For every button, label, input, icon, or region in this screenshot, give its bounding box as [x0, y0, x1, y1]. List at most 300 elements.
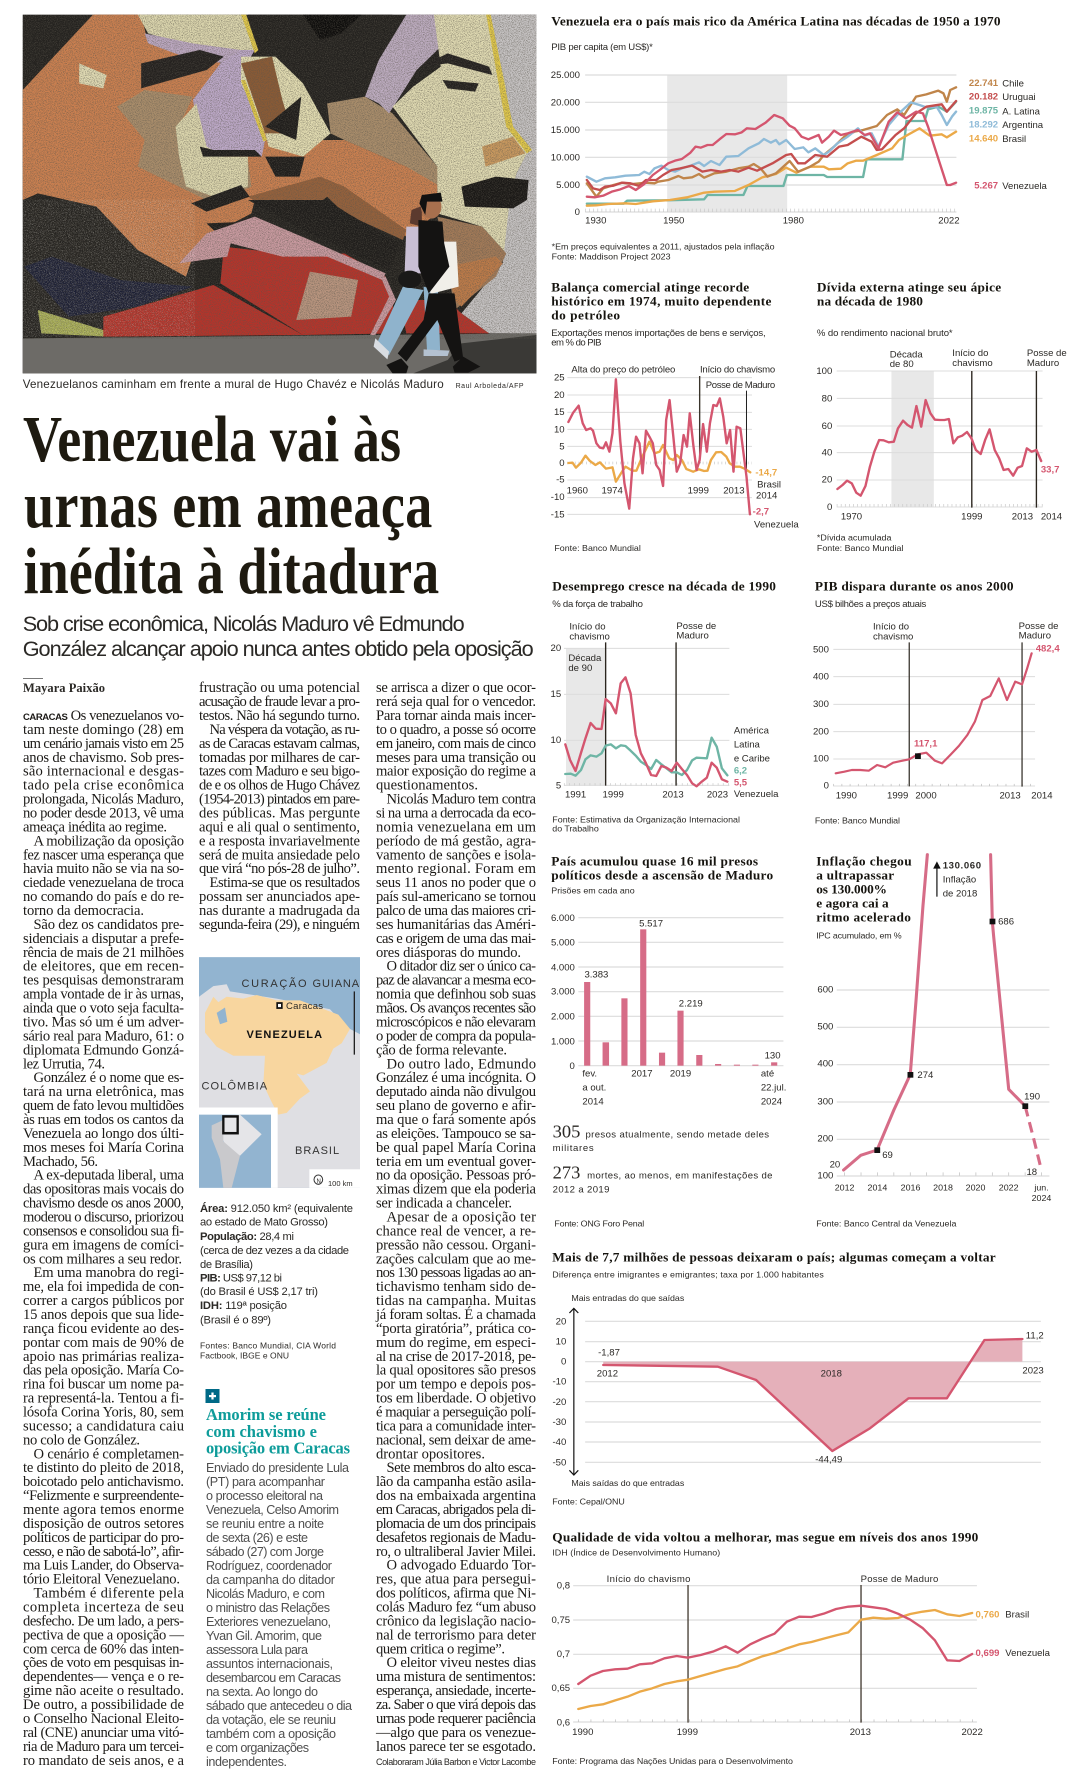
data labels: 18: [1026, 1167, 1037, 1178]
article text column 1: González é o nome que es-: [34, 1070, 184, 1086]
y axis labels: 200: [817, 1134, 833, 1145]
chart title: [551, 853, 774, 882]
value labels: 482,4: [1036, 643, 1060, 654]
legend: 19.875: [969, 105, 998, 116]
chart: PIB: [813, 578, 1060, 826]
source: Fonte: Banco Mundial: [817, 543, 903, 553]
article text column 3: ses humanitárias das Améri-: [376, 917, 536, 933]
line: Argentina: [587, 102, 956, 182]
y axis labels: 200: [813, 726, 829, 737]
article text column 1: A mobilização da oposição: [34, 833, 184, 849]
map: Venezuela: VENEZUELA: [246, 1029, 324, 1041]
annotations: [568, 621, 716, 674]
chart title: Qualidade de vida voltou a melhorar, mas segue em níveis dos anos 1990: [552, 1530, 979, 1545]
event markers: [698, 376, 702, 463]
article text column 3: Colaboraram Júlia Barbon e Victor Lacombe: [376, 1757, 536, 1767]
article text column 3: O advogado Eduardo Tor-: [386, 1558, 536, 1574]
country facts: Área: 912.050 km² (equivalente: [200, 1202, 353, 1215]
article text column 3: nos 130 pessoas ligadas ao an-: [376, 1265, 536, 1281]
y axis labels: -20: [553, 1397, 566, 1408]
annotations: Início do: [952, 348, 988, 359]
series labels: América: [734, 726, 770, 737]
chart subtitle: % da força de trabalho: [552, 599, 643, 610]
y axis labels: 6.000: [551, 913, 575, 924]
article text column 3: tica para a comunidade inter-: [376, 1418, 536, 1434]
article text column 3: dos políticos, afirma que Ni-: [376, 1586, 536, 1602]
article text column 1: ria de Maduro para um tercei-: [23, 1739, 184, 1755]
chart title: Mais de 7,7 milhões de pessoas deixaram o país; algumas começam a voltar: [552, 1250, 996, 1265]
article text column 1: consensos e consolidou sua fi-: [23, 1223, 184, 1239]
article text column 3: ores diásporas do mundo.: [376, 945, 521, 961]
country facts: Factbook, IBGE e ONU: [200, 1350, 289, 1360]
article text column 3: esperança, ansiedade, incerte-: [376, 1683, 536, 1699]
article text column 2: tazes com Maduro e seu bigo-: [199, 764, 360, 780]
chart: dívida externa: [816, 280, 1067, 553]
article text column 3: no da oposição. Pessoas pró-: [376, 1168, 536, 1184]
article text column 1: quem de fato levou multidões: [23, 1098, 184, 1114]
x axis labels: 1980: [783, 215, 804, 226]
sidebar text: independentes.: [206, 1755, 287, 1769]
y axis labels: -10: [551, 492, 565, 503]
article text column 3: seu plano de governo e afir-: [376, 1098, 536, 1114]
x axis labels: 1991: [565, 789, 586, 800]
annotations: chavismo: [952, 358, 993, 369]
article text column 1: mos meses foi María Corina: [23, 1140, 185, 1156]
y axis labels: 15.000: [551, 125, 580, 136]
chart: desemprego: [551, 578, 1060, 834]
article text column 3: Apesar de a oposição ter: [386, 1210, 536, 1226]
article text column 1: tado pela crise econômica: [23, 778, 185, 794]
article text column 2: aqui e ali qual o sentimento,: [199, 819, 360, 835]
x axis labels: 1999: [961, 511, 982, 522]
article text column 1: das pela oposição. María Co-: [23, 1363, 184, 1379]
y axis labels: -5: [556, 475, 565, 486]
stat: 273 mortes: [553, 1163, 772, 1195]
end labels: Brasil: [757, 479, 781, 490]
series labels: Venezuela: [734, 789, 779, 800]
article text column 3: desafetos regionais de Madu-: [376, 1530, 536, 1546]
labels: 2018: [821, 1369, 842, 1380]
x axis labels: 1999: [603, 789, 624, 800]
line: inflação: [844, 855, 927, 1170]
line: PIB Venezuela: [836, 653, 1032, 773]
article text column 3: colás Maduro fez “um abuso: [376, 1600, 536, 1616]
source: [552, 814, 740, 834]
icon: plus: [206, 1389, 220, 1403]
labels: 2023: [1022, 1365, 1044, 1376]
article text column 1: me, ela foi impedida de con-: [23, 1279, 184, 1295]
x axis labels: 2019: [670, 1069, 691, 1080]
article text column 3: uma mistura de sentimentos:: [376, 1669, 536, 1685]
sidebar text: o processo eleitoral na: [206, 1489, 323, 1503]
x axis labels: 2013: [1012, 511, 1033, 522]
stat: 305 presos: 305: [553, 1122, 580, 1141]
article text column 1: ma Luis Lander, do Observa-: [23, 1558, 184, 1574]
sidebar text: (PT) para acompanhar: [206, 1475, 325, 1489]
x axis labels: [585, 215, 960, 226]
x axis labels: 2000: [915, 790, 937, 801]
event markers: [606, 642, 676, 786]
y axis labels: -15: [551, 509, 565, 520]
country facts: [200, 1202, 353, 1360]
source: Fonte: ONG Foro Penal: [554, 1219, 644, 1229]
sidebar text: sábado que antecedeu o dia: [206, 1699, 352, 1713]
labels: 11,2: [1026, 1330, 1044, 1341]
article text column 3: microscópicos e não elevaram: [376, 1014, 537, 1030]
country facts: Fontes: Banco Mundial, CIA World: [200, 1341, 336, 1351]
article text column 1: O cenário é completamen-: [34, 1446, 184, 1462]
value labels: 117,1: [914, 739, 937, 750]
annotations: Início do chavismo: [700, 365, 775, 376]
article text column 3: Do outro lado, Edmundo: [386, 1056, 536, 1072]
article text column 3: drontar opositores.: [376, 1446, 485, 1462]
article text column 1: ciedade venezuelana de troca: [23, 875, 185, 891]
annotations: Início do: [569, 622, 606, 633]
chart title: [551, 280, 772, 323]
y axis labels: 20.000: [551, 97, 580, 108]
y axis labels: 10: [554, 425, 565, 436]
chart title: políticos desde a ascensão de Maduro: [551, 867, 774, 882]
data labels: 274: [917, 1070, 933, 1081]
article text column 3: maior exposição do regime a: [376, 764, 537, 780]
chart subtitle: PIB per capita (em US$)*: [551, 42, 653, 53]
annotations: chavismo: [569, 631, 610, 642]
photo caption: Venezuelanos caminham em frente a mural de Hugo Chavéz e Nicolás Maduro: [23, 378, 444, 391]
stat: 273 mortes: 273: [553, 1163, 580, 1183]
sidebar text: se reuniu entre a noite: [206, 1517, 324, 1531]
article text column 3: questionamentos.: [376, 778, 478, 794]
stat: 305 presos: presos atualmente, sendo metade deles: [585, 1129, 769, 1140]
article text column 1: moderou o discurso, priorizou: [23, 1210, 185, 1226]
y axis labels: 0,75: [551, 1615, 570, 1626]
y axis labels: 0,6: [557, 1717, 570, 1728]
x axis labels: [841, 511, 1062, 522]
article text column 1: ral (CNE) anunciar uma vitó-: [23, 1725, 184, 1741]
chart: migração: [552, 1250, 1044, 1506]
photo: mural of Chávez and Maduro with pedestrians: [23, 15, 536, 373]
sidebar text: também com a oposição: [206, 1727, 336, 1741]
article text column 2: des públicas. Mas pergunte: [199, 806, 360, 822]
y axis labels: [813, 644, 829, 792]
article text column 1: no colo de González.: [23, 1432, 140, 1448]
chart title: e agora cai a: [816, 895, 889, 910]
y axis labels: [816, 366, 832, 513]
y axis labels: 100: [813, 754, 829, 765]
subheadline: González alcançar apoio nunca antes obtido pela oposição: [23, 636, 534, 661]
y axis labels: 10: [556, 1337, 566, 1348]
event markers: [688, 1585, 861, 1723]
article text column 3: nal de terrorismo para deter: [376, 1627, 536, 1643]
article text column 1: um cenário jamais visto em 25: [23, 736, 184, 752]
y axis labels: 0: [575, 207, 580, 218]
article text column 3: la qual opositores são presos: [376, 1363, 536, 1379]
article text column 1: sidenciais a disputar a prefe-: [23, 931, 184, 947]
article text column 3: ma que o fará somente após: [376, 1112, 536, 1128]
y axis labels: 80: [822, 393, 832, 404]
article text column 1: o Conselho Nacional Eleito-: [23, 1711, 184, 1727]
x axis labels: 22.jul.: [761, 1083, 786, 1094]
series labels: 0,699: [976, 1648, 999, 1659]
y axis labels: 5: [559, 441, 565, 452]
article text column 2: as de Caracas estavam calmas,: [199, 736, 360, 752]
article text column 3: dos na embaixada argentina: [376, 1488, 537, 1504]
y axis labels: 0,8: [557, 1581, 570, 1592]
article text column 3: Nicolás Maduro tem contra: [386, 792, 537, 808]
event markers: [909, 642, 1022, 787]
article text column 3: as eleições. Tampouco se sa-: [376, 1126, 536, 1142]
article text column 2: tomadas por milhares de car-: [199, 750, 360, 766]
article text column 3: nomia venezuelana em um: [376, 819, 537, 835]
article text column 1: tam neste domingo (28) em: [23, 722, 185, 738]
annotations: [873, 621, 1058, 642]
sidebar heading: [206, 1405, 351, 1458]
sidebar text: sábado (27) com Jorge: [206, 1545, 324, 1559]
y axis labels: -10: [553, 1377, 566, 1388]
y axis labels: 100: [817, 1171, 833, 1182]
article text column 2: frustração ou uma potencial: [199, 680, 360, 696]
article text column 3: be qual papel María Corina: [376, 1140, 537, 1156]
map: Venezuela: BRASIL: [295, 1145, 340, 1157]
article text column 1: havia muito não se via na so-: [23, 861, 184, 877]
chart title: [816, 853, 912, 924]
sidebar text: [206, 1461, 352, 1769]
y axis labels: 300: [813, 699, 829, 710]
sidebar text: e com organizações: [206, 1741, 309, 1755]
chart title: PIB dispara durante os anos 2000: [815, 578, 1014, 593]
article text column 1: rina foi buscar um nome pa-: [23, 1377, 184, 1393]
y axis labels: 10: [551, 735, 561, 746]
article text column 3: O eleitor viveu nestes dias: [386, 1655, 536, 1671]
line: inflação descending: [991, 855, 1025, 1106]
y axis labels: 1.000: [551, 1036, 575, 1047]
sidebar heading: oposição em Caracas: [206, 1438, 351, 1458]
article text column 1: ro mandato de seis anos, e a: [23, 1753, 185, 1769]
legend: 5.267: [974, 180, 998, 191]
source: Fonte: Banco Mundial: [815, 816, 900, 826]
line: dívida: [837, 400, 1041, 496]
article text column 1: fez nascer uma esperança que: [23, 847, 184, 863]
country facts: de Brasília): [200, 1259, 253, 1271]
annotations: Alta do preço do petróleo: [571, 365, 675, 376]
article text column 1: completa incerteza de seu: [23, 1600, 185, 1616]
annotations: Posse de: [1027, 348, 1067, 359]
line: inflação projected: [1025, 1106, 1042, 1171]
source: Fonte: Banco Mundial: [554, 543, 641, 553]
line: A. Latina: [587, 102, 956, 204]
article text column 1: Machado, 56.: [23, 1154, 98, 1170]
sidebar text: Venezuela, Celso Amorim: [206, 1503, 339, 1517]
y axis labels: [817, 984, 833, 1182]
x axis labels: 2018: [933, 1183, 953, 1193]
map: Venezuela: Caracas: [286, 1001, 323, 1012]
sidebar text: Rodríguez, coordenador: [206, 1559, 332, 1573]
x axis labels: 1999: [688, 486, 709, 497]
country facts: (do Brasil é US$ 2,17 tri): [200, 1286, 318, 1298]
article text column 3: —algo que para os venezue-: [375, 1725, 536, 1741]
labels: -44,49: [815, 1454, 842, 1465]
x axis labels: [572, 1727, 983, 1738]
article text column 2: testos. Não há segundo turno.: [199, 708, 360, 724]
article text column 2: nas durante a madrugada da: [199, 903, 361, 919]
bar labels: 130: [765, 1050, 781, 1061]
bar labels: 3.383: [584, 970, 608, 981]
y axis labels: 20: [551, 643, 561, 654]
article text column 3: Para tornar ainda mais incer-: [376, 708, 536, 724]
chart: balança comercial: [551, 280, 1067, 553]
article text column 3: mento regional. Foram em: [376, 861, 537, 877]
article text column 1: são internacional e desgas-: [23, 764, 184, 780]
y axis labels: 0: [827, 502, 832, 513]
article text column 3: ximas dizem que ela poderia: [376, 1182, 537, 1198]
article text column 2: segunda-feira (29), e ninguém: [199, 917, 361, 933]
chart title: Inflação chegou: [816, 853, 912, 868]
bar labels: 2.219: [679, 998, 703, 1009]
country facts: (cerca de dez vezes a da cidade: [200, 1245, 349, 1257]
x axis labels: 2022: [962, 1727, 983, 1738]
series labels: 6,2: [734, 766, 747, 777]
chart title: País acumulou quase 16 mil presos: [551, 853, 758, 868]
article text column 3: [375, 680, 537, 1767]
labels: 2012: [597, 1369, 618, 1380]
map: Venezuela: COLÔMBIA: [202, 1080, 268, 1092]
legend: 22.741: [969, 78, 998, 89]
article text column 3: meses para uma transição ou: [376, 750, 537, 766]
article text column 3: em janeiro, com mais de cinco: [376, 736, 536, 752]
sidebar heading: Amorim se reúne: [206, 1405, 326, 1424]
labels: -1,87: [598, 1348, 620, 1359]
y axis labels: 500: [817, 1022, 833, 1033]
x axis labels: 2012: [835, 1183, 855, 1193]
headline: urnas em ameaça: [24, 469, 432, 542]
article text column 2: possam ser anunciados ape-: [199, 889, 360, 905]
x axis labels: 1990: [572, 1727, 593, 1738]
y axis labels: [551, 373, 565, 520]
article text column 2: acusação de fraude levar a pro-: [199, 694, 360, 710]
article text column 3: país sul-americano se tornou: [376, 889, 537, 905]
chart title: [817, 280, 1001, 309]
y axis labels: 40: [822, 448, 832, 459]
series labels: e Caribe: [734, 754, 770, 765]
article text column 1: das opositoras mais vocais do: [23, 1182, 184, 1198]
country facts: ao estado de Mato Grosso): [200, 1216, 328, 1228]
article text column 1: gura em imagens de comíci-: [23, 1237, 184, 1253]
series labels: [976, 1609, 1051, 1659]
article text column 1: A ex-deputada liberal, uma: [34, 1168, 185, 1184]
article text column 1: tará na urna eletrônica, mas: [23, 1084, 184, 1100]
article text column 1: tivo. Mas só um é um adver-: [23, 1014, 184, 1030]
line: Brasil: [587, 128, 956, 206]
photo credit: Raul Arboleda/AFP: [456, 383, 524, 390]
chart title: do petróleo: [551, 308, 620, 323]
article text column 1: mente agora temos enorme: [23, 1502, 184, 1518]
article text column 1: pontar com mais de 90% de: [23, 1335, 184, 1351]
y axis labels: [551, 643, 561, 791]
article text column 3: crônico da legislação nacio-: [376, 1614, 536, 1630]
x axis labels: [836, 790, 1053, 801]
article text column 1: gime não aceite o resultado.: [23, 1683, 184, 1699]
article text column 1: no comando do país e do re-: [23, 889, 184, 905]
series labels: 0,760: [976, 1609, 999, 1620]
article text column 3: si na urna a derrocada da eco-: [376, 806, 536, 822]
chart subtitle: Prisões em cada ano: [551, 886, 635, 896]
article text column 3: za. Saber o que virá depois das: [376, 1697, 536, 1713]
line: Chile: [587, 87, 956, 197]
article text column 1: os com milhares a seu redor.: [23, 1251, 182, 1267]
headline: Venezuela vai às: [23, 403, 401, 476]
article text column 1: “Felizmente e surpreendente-: [23, 1488, 184, 1504]
data labels: 190: [1024, 1091, 1040, 1102]
article text column 2: que virá “no pós-28 de julho”.: [199, 861, 360, 877]
chart: presos políticos: [551, 853, 1051, 1229]
decade band: [891, 371, 934, 507]
y axis labels: 5: [556, 780, 561, 791]
article text column 3: tichavismo tenham sido de-: [376, 1279, 536, 1295]
y axis labels: 3.000: [551, 987, 575, 998]
article text column 1: apoio nas primárias realiza-: [23, 1349, 184, 1365]
article text column 3: em Caracas, abrigados pela di-: [376, 1502, 536, 1518]
legend: Brasil: [1002, 134, 1026, 145]
legend: 20.182: [969, 91, 998, 102]
sidebar text: da votação, ele se reuniu: [206, 1713, 336, 1727]
y axis labels: 0,7: [557, 1649, 570, 1660]
x axis labels: 2013: [850, 1727, 871, 1738]
axis direction arrow: [569, 1308, 578, 1475]
article text column 1: rança ficou evidente ao des-: [23, 1321, 184, 1337]
article text column 1: sário real para Maduro, 61: o: [23, 1028, 184, 1044]
legend: Chile: [1002, 79, 1024, 90]
y axis labels: 20: [554, 390, 565, 401]
article text column 3: teria em um eventual gover-: [376, 1154, 536, 1170]
chart title: Desemprego cresce na década de 1990: [552, 578, 776, 593]
line: Uruguai: [587, 101, 956, 190]
article text column 3: pressão não cessou. Organi-: [376, 1237, 536, 1253]
article text column 3: O ditador diz ser o único ca-: [386, 959, 536, 975]
x axis labels: a out.: [582, 1083, 606, 1094]
stat: 305 presos: [553, 1122, 769, 1154]
x axis labels: 2013: [999, 790, 1021, 801]
article text column 1: desfecho. De um lado, a pers-: [23, 1614, 184, 1630]
annotations: [571, 365, 775, 391]
article text column 1: ra representá-la. Tentou a fi-: [23, 1391, 184, 1407]
x axis labels: 2013: [662, 789, 684, 800]
y axis labels: 2.000: [551, 1011, 575, 1022]
article text column 1: sucesso; a candidatura caiu: [23, 1418, 185, 1434]
article text column 2: Estima-se que os resultados: [210, 875, 360, 891]
y axis labels: [551, 913, 575, 1072]
article text column 3: lanos parece ter se esgotado.: [376, 1739, 536, 1755]
article text column 1: anos de chavismo. Sob pres-: [23, 750, 184, 766]
y axis labels: 600: [817, 984, 833, 995]
chart subtitle: % do rendimento nacional bruto*: [817, 328, 953, 339]
chart title: na década de 1980: [817, 294, 923, 309]
sidebar text: Nicolás Maduro, e com: [206, 1587, 325, 1601]
data labels: 69: [882, 1150, 893, 1161]
source: Fonte: Cepal/ONU: [552, 1496, 625, 1506]
annotations: Posse de: [1019, 621, 1058, 632]
x axis labels: 2014: [1031, 790, 1053, 801]
data labels: 20: [830, 1160, 840, 1171]
annotations: Década: [568, 653, 602, 664]
sidebar text: na sexta. Ao longo do: [206, 1685, 318, 1699]
map: Venezuela: CURAÇÃO: [242, 977, 308, 990]
article text column 3: tidas na campanha. Muitas: [376, 1293, 536, 1309]
x axis labels: 2022: [938, 215, 960, 226]
article text column 1: disposição de outros setores: [23, 1516, 184, 1532]
line: saldo migratório: [603, 1339, 1022, 1451]
y axis labels: 0: [561, 1357, 566, 1368]
annotations: de 90: [568, 663, 592, 674]
article text column 3: quem critica o regime”.: [376, 1641, 505, 1657]
